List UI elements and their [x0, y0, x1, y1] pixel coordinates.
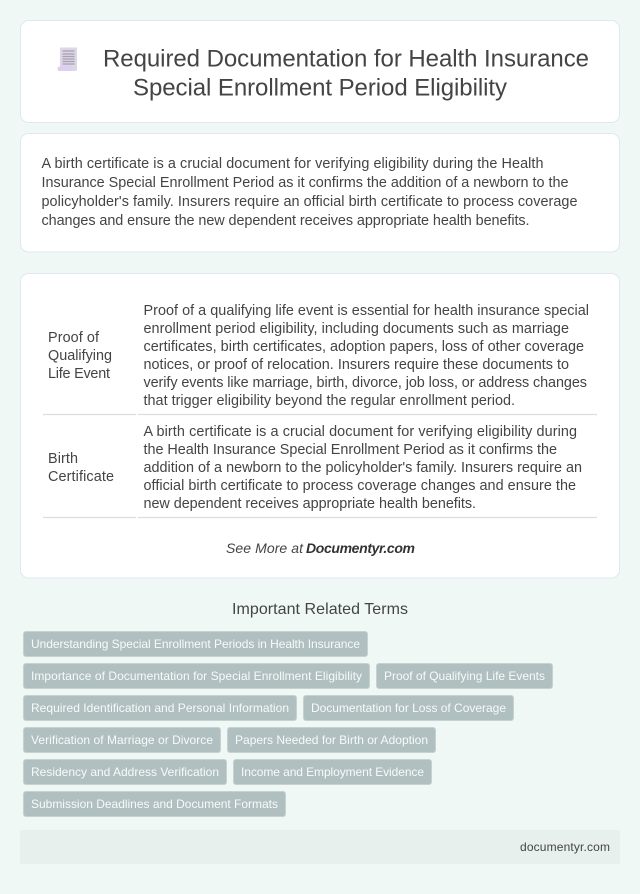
- row label: birth certificate: [48, 451, 114, 485]
- tag: Verification of Marriage or Divorce: [31, 733, 213, 747]
- tag: [24, 760, 226, 784]
- tag: [24, 696, 296, 720]
- row text: proof of qualifying life event: certificates, birth certificates, adoption papers, loss of other coverage: [144, 339, 584, 355]
- tag: [304, 696, 514, 720]
- row text: proof of qualifying life event: notices, or proof of relocation. Insurers require these documents to: [144, 357, 569, 373]
- tag: [234, 760, 432, 784]
- text block: introduction: policyholder's family. Insurers require an official birth certificate to process coverage: [42, 194, 578, 210]
- title: Required Documentation for Health Insurance: [103, 46, 589, 72]
- tag: Residency and Address Verification: [31, 765, 219, 779]
- text block: introduction: changes and ensure the new dependent receives appropriate health benefits.: [42, 213, 530, 229]
- panel: documents table: [20, 274, 620, 578]
- tags: related terms: [24, 632, 552, 816]
- row text: proof of qualifying life event: enrollment period eligibility, including documents such as marriage: [144, 321, 569, 337]
- row text: proof of qualifying life event: Proof of a qualifying life event is essential for health insurance special: [144, 303, 589, 319]
- row text: proof of qualifying life event: that trigger eligibility beyond the regular enrollment period.: [144, 393, 515, 409]
- row text: birth certificate: addition of a newborn to the policyholder's family. Insurers require an: [144, 460, 582, 476]
- row text: birth certificate: A birth certificate is a crucial document for verifying eligibility during: [144, 424, 577, 440]
- row text: birth certificate: official birth certificate to process coverage changes and ensure the: [144, 478, 576, 494]
- row text: proof of qualifying life event: [144, 303, 589, 409]
- text block: introduction: Insurance Special Enrollment Period as it confirms the addition of a newborn to the: [42, 175, 568, 191]
- row label: birth certificate: Certificate: [48, 469, 114, 485]
- tag: [376, 664, 552, 688]
- tag: Required Identification and Personal Information: [31, 701, 289, 715]
- tag: Importance of Documentation for Special Enrollment Eligibility: [31, 669, 362, 683]
- row label: proof of qualifying life event: Proof of: [48, 330, 100, 346]
- tag: [24, 728, 220, 752]
- panel: introduction: [20, 134, 620, 252]
- row label: proof of qualifying life event: Qualifying: [48, 348, 112, 364]
- row label: birth certificate: Birth: [48, 451, 78, 467]
- tag: [24, 792, 286, 816]
- footer bar: [20, 830, 620, 864]
- text block: introduction: A birth certificate is a crucial document for verifying eligibility during the Health: [42, 156, 544, 172]
- see more link: Documentyr.com: [306, 540, 415, 556]
- title: [103, 46, 589, 102]
- row text: proof of qualifying life event: verify events like marriage, birth, divorce, job loss, or address changes: [144, 375, 587, 391]
- tag: Submission Deadlines and Document Formats: [31, 797, 278, 811]
- row text: birth certificate: new dependent receives appropriate health benefits.: [144, 496, 476, 512]
- tag: Income and Employment Evidence: [241, 765, 424, 779]
- row label: proof of qualifying life event: Life Event: [48, 366, 110, 382]
- panel: title card: [20, 20, 620, 122]
- tag: [24, 664, 370, 688]
- row label: proof of qualifying life event: [48, 330, 112, 382]
- row text: birth certificate: [144, 424, 582, 512]
- icon: document scroll: [58, 48, 77, 71]
- tag: Papers Needed for Birth or Adoption: [235, 733, 428, 747]
- see more link: [226, 540, 415, 556]
- footer bar: documentyr.com: [520, 840, 610, 854]
- tag: Proof of Qualifying Life Events: [384, 669, 545, 683]
- tag: Documentation for Loss of Coverage: [311, 701, 506, 715]
- title: Special Enrollment Period Eligibility: [133, 74, 507, 102]
- heading: important related terms: Important Related Terms: [232, 601, 408, 618]
- tag: Understanding Special Enrollment Periods in Health Insurance: [31, 637, 360, 651]
- tag: [24, 632, 368, 656]
- tag: [228, 728, 436, 752]
- text block: introduction: [42, 156, 578, 229]
- row text: birth certificate: the Health Insurance Special Enrollment Period as it confirms the: [144, 442, 557, 458]
- see more link: See More at: [226, 540, 304, 556]
